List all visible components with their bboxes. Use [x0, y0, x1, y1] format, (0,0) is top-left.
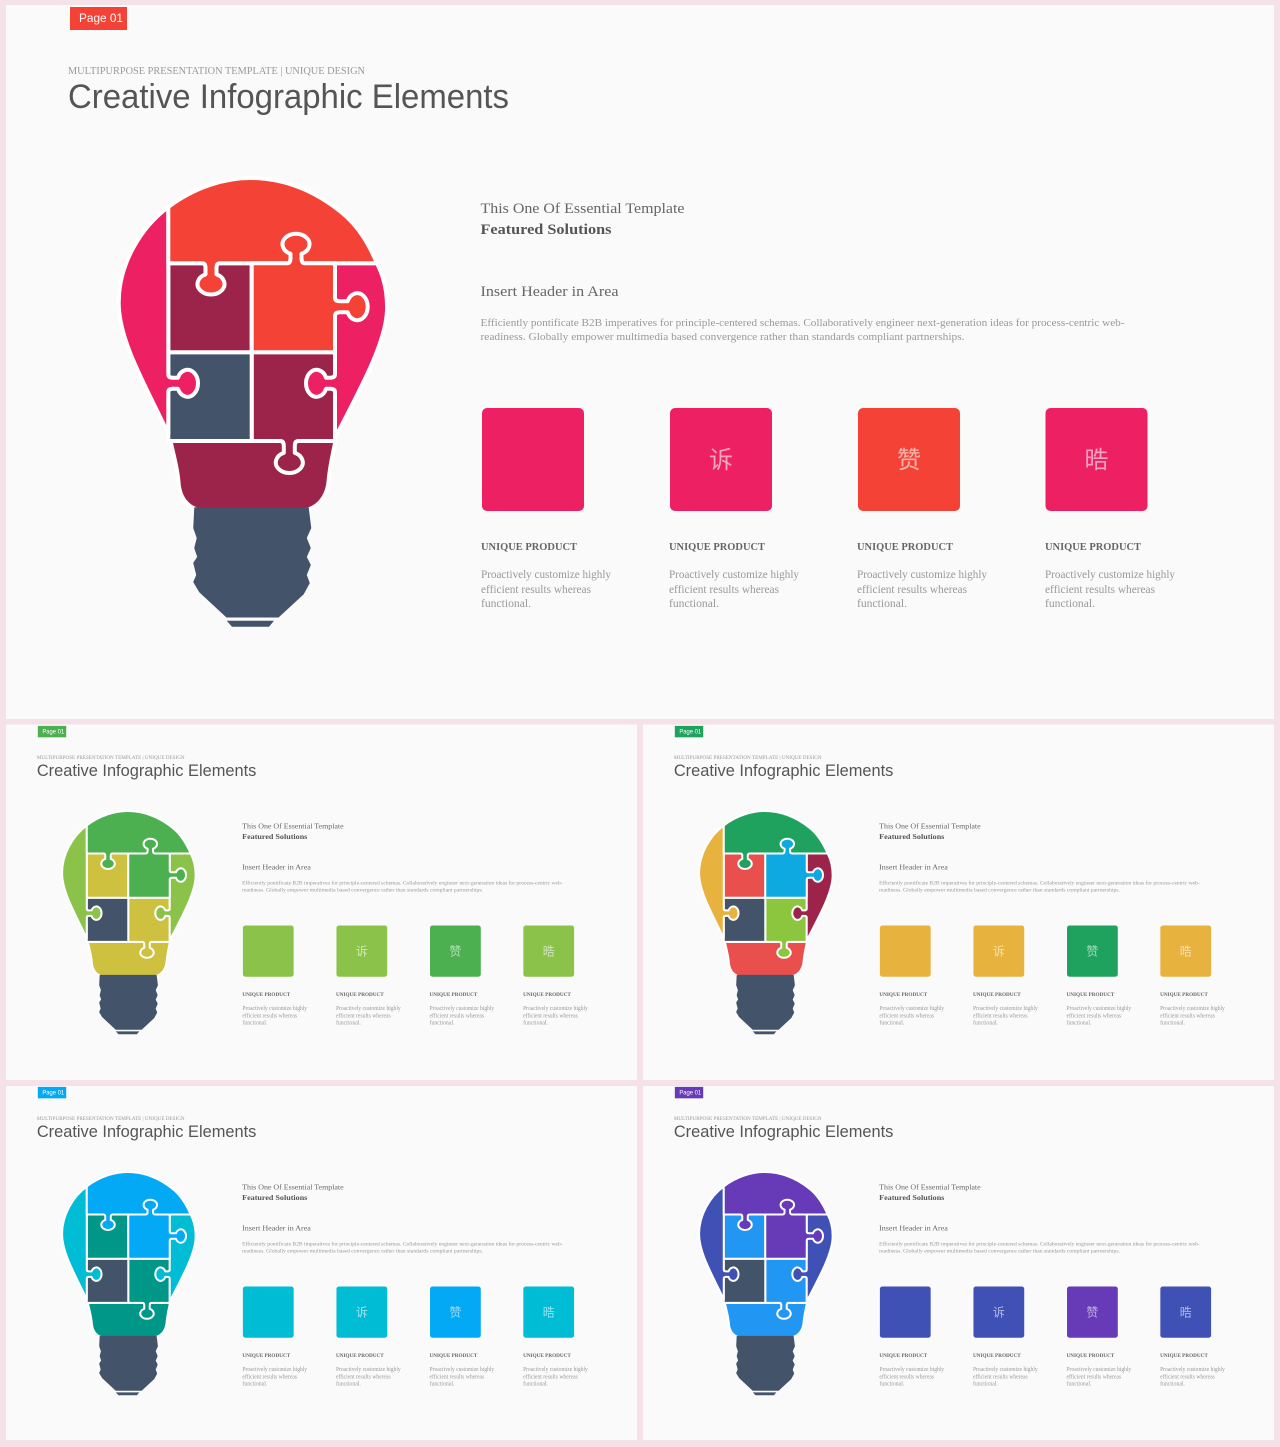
product card 2: 诉 — [356, 1305, 368, 1319]
product card 2: UNIQUE PRODUCT — [973, 992, 1021, 998]
product card 3: functional. — [430, 1020, 455, 1027]
page badge — [38, 726, 66, 737]
sub-header: Insert Header in Area — [242, 1224, 312, 1233]
product card 4: 晧 — [1084, 447, 1108, 474]
title: Creative Infographic Elements — [68, 78, 509, 116]
paragraph: readiness. Globally empower multimedia based convergence rather than standards compliant partnerships. — [879, 888, 1120, 894]
product card 4: functional. — [1160, 1020, 1186, 1027]
product card 2: Proactively customize highly — [973, 1367, 1038, 1373]
paragraph: readiness. Globally empower multimedia based convergence rather than standards compliant partnerships. — [242, 1249, 483, 1255]
product card 4: efficient results whereas — [523, 1013, 579, 1020]
product card 4: Proactively customize highly — [1160, 1006, 1225, 1012]
product card 2: 诉 — [709, 447, 733, 474]
paragraph: readiness. Globally empower multimedia based convergence rather than standards compliant partnerships. — [879, 1249, 1120, 1255]
product card 1 — [879, 925, 944, 1027]
product card 3 — [430, 925, 494, 1027]
product card 1: UNIQUE PRODUCT — [879, 1353, 927, 1359]
product card 1: efficient results whereas — [242, 1374, 298, 1381]
product card 3 — [857, 408, 987, 610]
product card 3: Proactively customize highly — [857, 569, 987, 581]
product card 3 — [430, 1286, 494, 1388]
product card 3: efficient results whereas — [1067, 1374, 1122, 1381]
panel: multicolour variant — [643, 724, 1274, 1080]
product card 3: functional. — [857, 598, 907, 610]
paragraph — [879, 880, 1200, 894]
product card 4: efficient results whereas — [523, 1374, 579, 1381]
paragraph: readiness. Globally empower multimedia based convergence rather than standards compliant partnerships. — [480, 331, 965, 343]
paragraph: Efficiently pontificate B2B imperatives for principle-centered schemas. Collaboratively engineer next-generation ideas for process-centric web- — [242, 880, 563, 887]
heading text: This One Of Essential Template — [242, 821, 344, 830]
product card 2: functional. — [973, 1381, 998, 1388]
product card 2: 诉 — [993, 944, 1005, 958]
product card 3: functional. — [430, 1381, 455, 1388]
product card 4 — [1160, 925, 1225, 1027]
product card 2: efficient results whereas — [669, 584, 780, 596]
product card 1: efficient results whereas — [242, 1013, 298, 1020]
product card 2: functional. — [336, 1020, 361, 1027]
product card 2 — [336, 1286, 401, 1388]
product card 2: Proactively customize highly — [973, 1006, 1038, 1012]
product card 1: UNIQUE PRODUCT — [242, 1353, 290, 1359]
product card 4: UNIQUE PRODUCT — [523, 992, 571, 998]
product card 1: Proactively customize highly — [879, 1006, 944, 1012]
page badge — [38, 1087, 66, 1098]
panel: teal and blue variant — [6, 1086, 637, 1440]
product card 2: efficient results whereas — [973, 1013, 1028, 1020]
product card 2: UNIQUE PRODUCT — [669, 541, 766, 553]
product card 1: UNIQUE PRODUCT — [879, 992, 927, 998]
product card 2 — [336, 925, 401, 1027]
product card 3: functional. — [1067, 1381, 1092, 1388]
title: Creative Infographic Elements — [37, 761, 256, 780]
product card 1 — [879, 1286, 944, 1388]
product card 4: Proactively customize highly — [523, 1367, 588, 1373]
product card 4: functional. — [1160, 1381, 1186, 1388]
paragraph — [242, 880, 563, 894]
product card 2: efficient results whereas — [336, 1374, 391, 1381]
heading text: Featured Solutions — [242, 832, 307, 841]
product card 4: UNIQUE PRODUCT — [1160, 992, 1208, 998]
product card 4: 晧 — [1180, 1305, 1192, 1319]
title: Creative Infographic Elements — [37, 1122, 256, 1141]
product card 4: 晧 — [1180, 944, 1192, 958]
heading text — [879, 821, 981, 841]
product card 2: Proactively customize highly — [336, 1367, 401, 1373]
paragraph — [242, 1241, 563, 1255]
product card 4: Proactively customize highly — [1160, 1367, 1225, 1373]
product card 1: functional. — [879, 1381, 905, 1388]
subtitle: MULTIPURPOSE PRESENTATION TEMPLATE | UNIQUE DESIGN — [674, 1116, 822, 1122]
product card 4: efficient results whereas — [1045, 584, 1156, 596]
product card 3: 赞 — [1086, 1305, 1098, 1319]
paragraph — [879, 1241, 1200, 1255]
product card 1 — [242, 1286, 307, 1388]
product card 3: Proactively customize highly — [1067, 1006, 1131, 1012]
product card 3: Proactively customize highly — [430, 1367, 494, 1373]
paragraph — [480, 317, 1125, 343]
panel: main slide, red and pink — [6, 5, 1274, 719]
heading text — [480, 201, 685, 238]
subtitle: MULTIPURPOSE PRESENTATION TEMPLATE | UNIQUE DESIGN — [674, 755, 822, 761]
product card 4 — [523, 1286, 588, 1388]
product card 2: functional. — [973, 1020, 998, 1027]
subtitle: MULTIPURPOSE PRESENTATION TEMPLATE | UNIQUE DESIGN — [37, 1116, 185, 1122]
product card 2: UNIQUE PRODUCT — [336, 1353, 384, 1359]
heading text: This One Of Essential Template — [480, 201, 685, 217]
heading text — [242, 1182, 344, 1202]
product card 4: Proactively customize highly — [1045, 569, 1175, 581]
product card 1: efficient results whereas — [879, 1374, 935, 1381]
product card 1: Proactively customize highly — [242, 1006, 307, 1012]
product card 2 — [669, 408, 799, 610]
product card 3: efficient results whereas — [857, 584, 968, 596]
product card 2 — [973, 925, 1038, 1027]
product card 2: 诉 — [356, 944, 368, 958]
product card 4 — [1160, 1286, 1225, 1388]
product card 3: UNIQUE PRODUCT — [1067, 992, 1115, 998]
product card 4: UNIQUE PRODUCT — [1160, 1353, 1208, 1359]
product card 3: UNIQUE PRODUCT — [430, 992, 478, 998]
page badge — [675, 726, 703, 737]
page badge: Page 01 — [42, 1090, 65, 1096]
heading text: Featured Solutions — [879, 832, 944, 841]
page badge: Page 01 — [79, 11, 123, 25]
title: Creative Infographic Elements — [674, 1122, 893, 1141]
product card 4: functional. — [523, 1381, 549, 1388]
product card 3: efficient results whereas — [430, 1013, 485, 1020]
product card 4 — [523, 925, 588, 1027]
product card 3: 赞 — [897, 447, 921, 474]
product card 3: efficient results whereas — [1067, 1013, 1122, 1020]
title: Creative Infographic Elements — [674, 761, 893, 780]
paragraph: readiness. Globally empower multimedia based convergence rather than standards compliant partnerships. — [242, 888, 483, 894]
product card 1: Proactively customize highly — [879, 1367, 944, 1373]
icon: puzzle light bulb — [62, 811, 196, 1034]
product card 3: UNIQUE PRODUCT — [857, 541, 954, 553]
product card 3: UNIQUE PRODUCT — [1067, 1353, 1115, 1359]
product card 1: efficient results whereas — [879, 1013, 935, 1020]
product card 1: functional. — [879, 1020, 905, 1027]
page badge: Page 01 — [679, 729, 702, 735]
product card 1: functional. — [242, 1381, 268, 1388]
sub-header: Insert Header in Area — [879, 863, 949, 872]
product card 1: Proactively customize highly — [242, 1367, 307, 1373]
product card 3: Proactively customize highly — [430, 1006, 494, 1012]
panel: green variant — [6, 724, 637, 1080]
sub-header: Insert Header in Area — [242, 863, 312, 872]
product card 1 — [242, 925, 307, 1027]
icon: puzzle light bulb — [62, 1172, 196, 1395]
product card 2: UNIQUE PRODUCT — [336, 992, 384, 998]
product card 3: Proactively customize highly — [1067, 1367, 1131, 1373]
product card 2: UNIQUE PRODUCT — [973, 1353, 1021, 1359]
product card 1: efficient results whereas — [481, 584, 592, 596]
icon: puzzle light bulb — [699, 1172, 833, 1395]
product card 3: functional. — [1067, 1020, 1092, 1027]
paragraph: Efficiently pontificate B2B imperatives for principle-centered schemas. Collaboratively engineer next-generation ideas for process-centric web- — [242, 1241, 563, 1248]
heading text: This One Of Essential Template — [242, 1182, 344, 1191]
product card 3 — [1067, 1286, 1131, 1388]
product card 3: 赞 — [449, 1305, 461, 1319]
product card 4: efficient results whereas — [1160, 1374, 1216, 1381]
product card 1 — [481, 408, 611, 610]
page badge — [70, 7, 127, 30]
product card 2: 诉 — [993, 1305, 1005, 1319]
product card 1: Proactively customize highly — [481, 569, 611, 581]
page badge: Page 01 — [679, 1090, 702, 1096]
product card 4: UNIQUE PRODUCT — [523, 1353, 571, 1359]
panel: purple and indigo variant — [643, 1086, 1274, 1440]
product card 3: 赞 — [1086, 944, 1098, 958]
product card 4: 晧 — [543, 1305, 555, 1319]
product card 3 — [1067, 925, 1131, 1027]
product card 2: efficient results whereas — [973, 1374, 1028, 1381]
product card 4 — [1045, 408, 1175, 610]
product card 3: UNIQUE PRODUCT — [430, 1353, 478, 1359]
heading text: This One Of Essential Template — [879, 821, 981, 830]
product card 2: functional. — [336, 1381, 361, 1388]
product card 1: UNIQUE PRODUCT — [481, 541, 578, 553]
paragraph: Efficiently pontificate B2B imperatives for principle-centered schemas. Collaboratively engineer next-generation ideas for process-centric web- — [879, 880, 1200, 887]
product card 4: UNIQUE PRODUCT — [1045, 541, 1142, 553]
product card 1: functional. — [481, 598, 531, 610]
sub-header: Insert Header in Area — [480, 284, 619, 300]
product card 2: efficient results whereas — [336, 1013, 391, 1020]
product card 1: functional. — [242, 1020, 268, 1027]
product card 2: Proactively customize highly — [336, 1006, 401, 1012]
heading text: Featured Solutions — [242, 1193, 307, 1202]
product card 4: 晧 — [543, 944, 555, 958]
paragraph: Efficiently pontificate B2B imperatives for principle-centered schemas. Collaboratively engineer next-generation ideas for process-centric web- — [879, 1241, 1200, 1248]
product card 4: Proactively customize highly — [523, 1006, 588, 1012]
icon: puzzle light bulb — [699, 811, 833, 1034]
product card 2: functional. — [669, 598, 719, 610]
product card 4: functional. — [1045, 598, 1095, 610]
sub-header: Insert Header in Area — [879, 1224, 949, 1233]
heading text: This One Of Essential Template — [879, 1182, 981, 1191]
heading text — [879, 1182, 981, 1202]
paragraph: Efficiently pontificate B2B imperatives for principle-centered schemas. Collaboratively engineer next-generation ideas for process-centric web- — [480, 317, 1125, 329]
subtitle: MULTIPURPOSE PRESENTATION TEMPLATE | UNIQUE DESIGN — [37, 755, 185, 761]
heading text — [242, 821, 344, 841]
subtitle: MULTIPURPOSE PRESENTATION TEMPLATE | UNIQUE DESIGN — [68, 66, 365, 77]
product card 2 — [973, 1286, 1038, 1388]
page badge — [675, 1087, 703, 1098]
product card 4: efficient results whereas — [1160, 1013, 1216, 1020]
product card 3: efficient results whereas — [430, 1374, 485, 1381]
product card 3: 赞 — [449, 944, 461, 958]
product card 1: UNIQUE PRODUCT — [242, 992, 290, 998]
icon: puzzle light bulb — [119, 178, 387, 627]
product card 4: functional. — [523, 1020, 549, 1027]
page badge: Page 01 — [42, 729, 65, 735]
product card 2: Proactively customize highly — [669, 569, 799, 581]
heading text: Featured Solutions — [879, 1193, 944, 1202]
heading text: Featured Solutions — [480, 222, 612, 238]
